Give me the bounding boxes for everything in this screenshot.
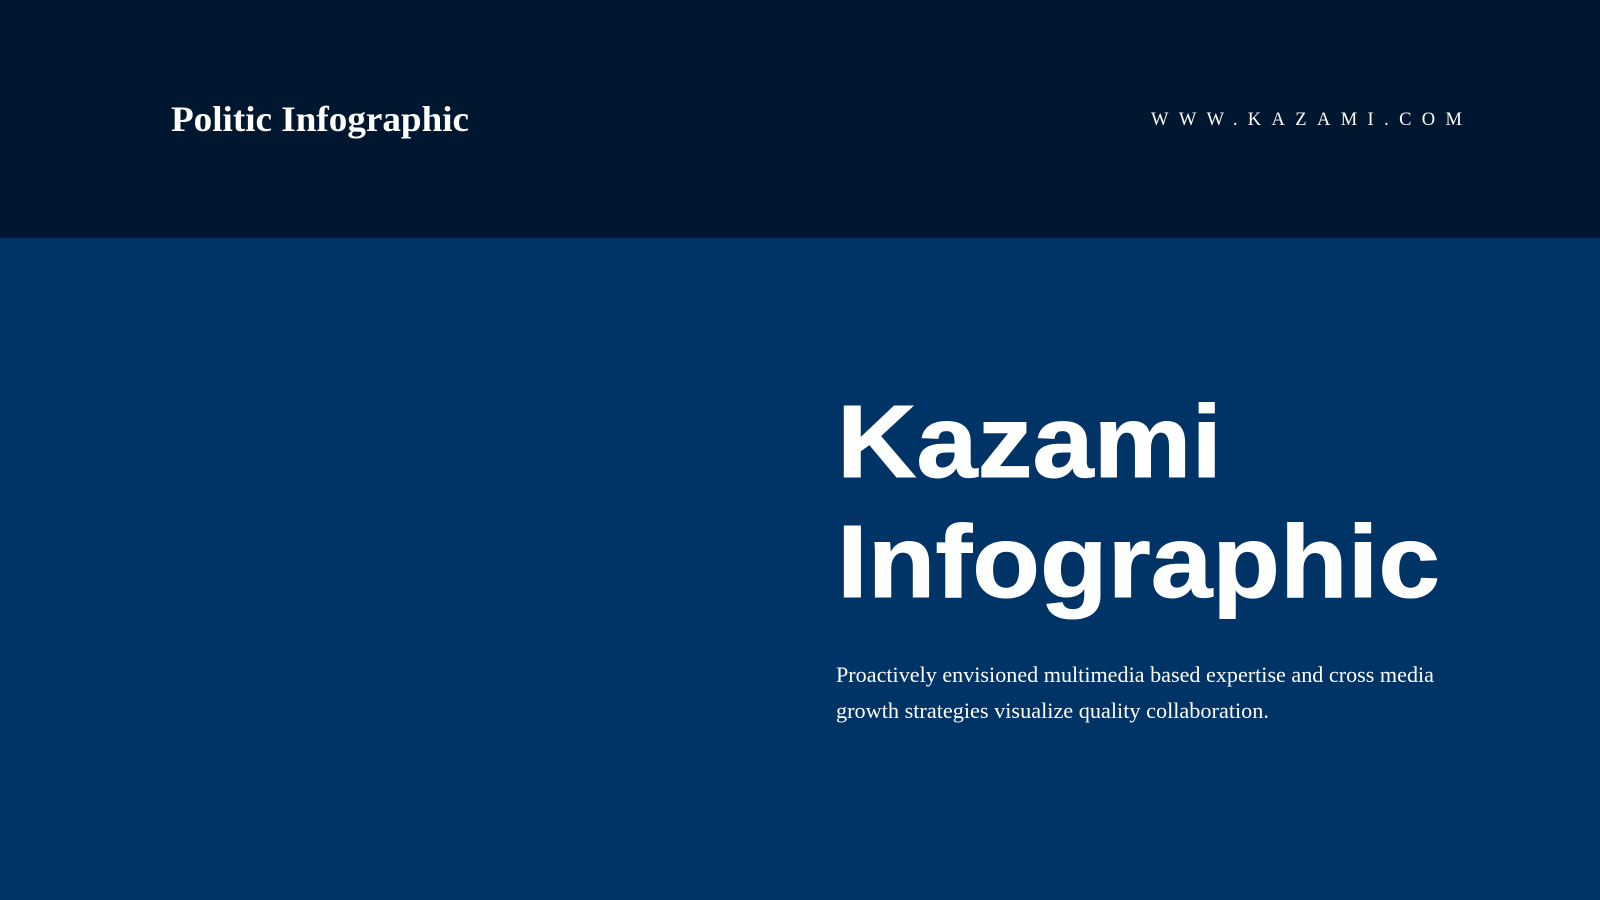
main heading: [837, 384, 1440, 619]
panel: top header band: [0, 0, 1600, 238]
description line 1: Proactively envisioned multimedia based expertise and cross media: [836, 662, 1434, 687]
header title: Politic Infographic: [171, 99, 469, 139]
description text: [836, 662, 1434, 723]
header website address: WWW.KAZAMI.COM: [1151, 110, 1462, 130]
heading line 1: Kazami: [837, 384, 1222, 499]
description line 2: growth strategies visualize quality collaboration.: [836, 698, 1269, 723]
heading line 2: Infographic: [837, 504, 1440, 619]
